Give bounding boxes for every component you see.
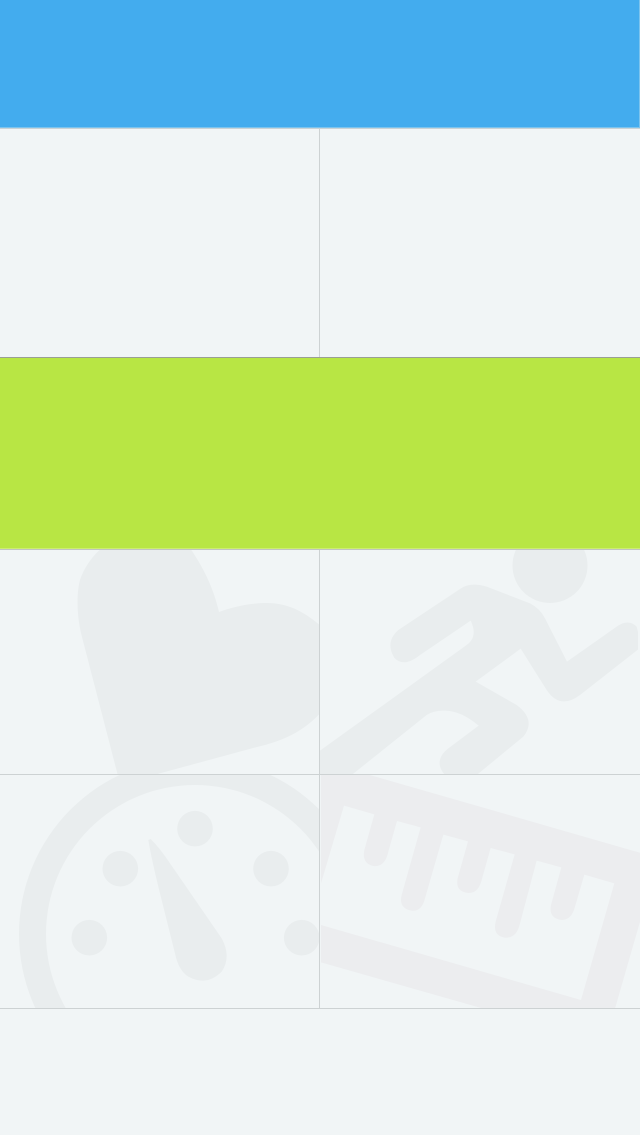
icon: running person <box>320 550 638 774</box>
panel: upper right empty cell <box>320 129 640 357</box>
icon: ruler <box>320 775 640 1008</box>
footer band <box>0 1009 640 1135</box>
panel: ruler cell <box>320 775 640 1009</box>
panel: heart cell <box>0 550 320 775</box>
panel: upper left empty cell <box>0 129 320 357</box>
divider band: green <box>0 357 640 550</box>
icon: dashboard gauge <box>0 775 319 1008</box>
panel: clock cell <box>0 775 320 1009</box>
panel: runner cell <box>320 550 640 775</box>
icon: heart <box>0 550 319 774</box>
header band: blue <box>0 0 640 129</box>
